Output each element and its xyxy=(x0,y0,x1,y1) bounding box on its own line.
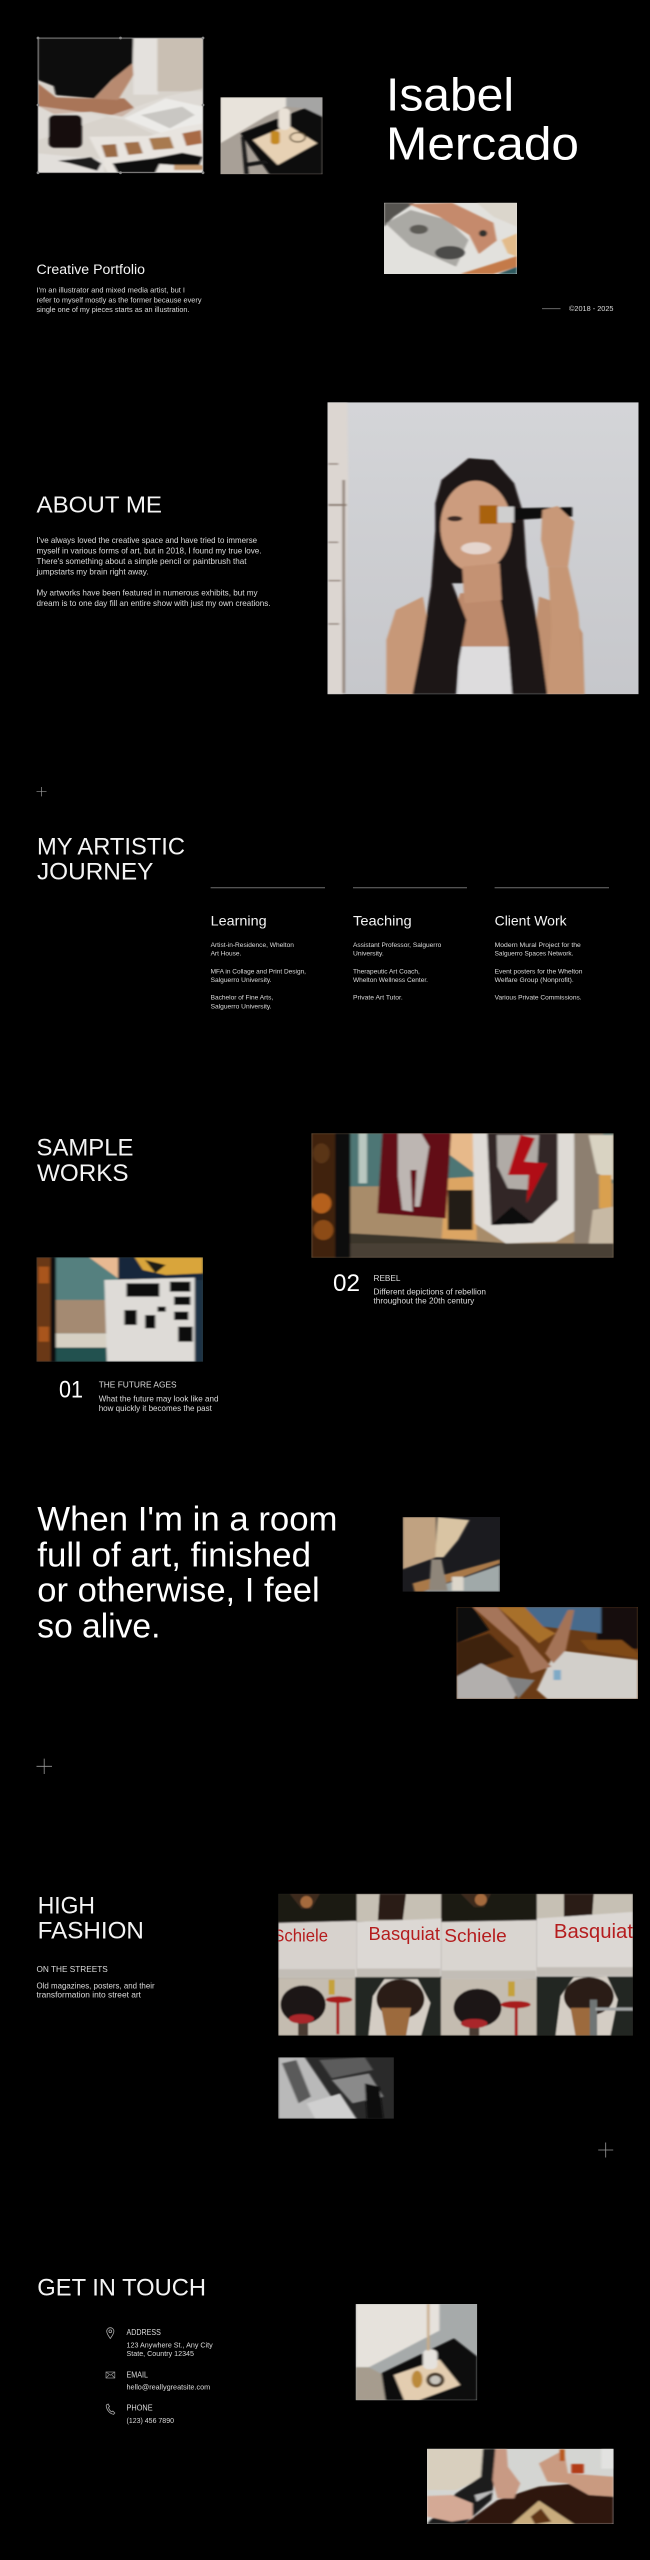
column: Client Work xyxy=(495,888,609,1002)
photo: future ages street poster xyxy=(36,1257,203,1362)
heading: MY ARTISTIC JOURNEY xyxy=(37,833,185,885)
subheading and description: Old magazines, posters, and their xyxy=(36,1980,155,1990)
panel: sample works xyxy=(36,1133,614,1413)
quote text xyxy=(37,1501,338,1645)
caption: 02 REBEL: REBEL xyxy=(374,1273,401,1283)
photo: table with vase and tray xyxy=(356,2304,478,2400)
heading: MY ARTISTIC JOURNEY: MY ARTISTIC xyxy=(37,833,185,860)
column: Learning: Salguerro University. xyxy=(211,977,272,984)
subheading and description: transformation into street art xyxy=(36,1990,142,2000)
heading: GET IN TOUCH: GET IN TOUCH xyxy=(37,2275,206,2302)
heading: SAMPLE WORKS xyxy=(36,1135,134,1187)
column: Teaching: University. xyxy=(353,951,384,958)
photo: black and white magazines xyxy=(278,2057,394,2119)
column: Learning: Bachelor of Fine Arts, xyxy=(211,995,273,1002)
column: Teaching: Whelton Wellness Center. xyxy=(353,977,428,984)
contact: phone xyxy=(106,2403,174,2425)
contact: address: 123 Anywhere St., Any City xyxy=(126,2340,213,2349)
about text: I've always loved the creative space and have tried to immerse xyxy=(36,536,258,545)
intro text: I'm an illustrator and mixed media artist, but I xyxy=(36,286,185,295)
icon: plus mark xyxy=(598,2142,613,2158)
intro text: refer to myself mostly as the former because every xyxy=(36,295,202,304)
heading: HIGH FASHION: FASHION xyxy=(38,1917,144,1944)
column: Teaching: Assistant Professor, Salguerro xyxy=(353,942,442,949)
photo: hands writing at desk with selection frame xyxy=(37,37,204,174)
poster lettering: Schiele xyxy=(444,1925,507,1946)
contact: phone: PHONE xyxy=(126,2403,153,2412)
contact: address: State, Country 12345 xyxy=(126,2349,194,2358)
panel: my artistic journey xyxy=(36,787,609,1010)
photo: side table with book xyxy=(220,97,322,174)
quote text: full of art, finished xyxy=(37,1536,311,1574)
contact: phone: (123) 456 7890 xyxy=(126,2416,174,2425)
heading: SAMPLE WORKS: WORKS xyxy=(37,1160,128,1187)
about text: myself in various forms of art, but in 2018, I found my true love. xyxy=(36,547,262,556)
photo: rebel street posters xyxy=(311,1133,614,1258)
icon: map pin xyxy=(107,2328,114,2338)
column: Learning: Learning xyxy=(211,913,267,929)
intro text xyxy=(36,286,202,314)
date range xyxy=(542,304,614,313)
panel: hero xyxy=(36,37,614,314)
poster lettering xyxy=(273,1920,633,1946)
title: Isabel Mercado: Isabel xyxy=(386,69,514,121)
column: Learning xyxy=(211,888,325,1010)
photo: woman holding paintbrush over eye xyxy=(328,402,638,694)
subheading and description xyxy=(36,1964,155,2000)
column: Learning: Artist-in-Residence, Whelton xyxy=(211,942,294,949)
contact: email: EMAIL xyxy=(126,2370,149,2379)
column: Teaching xyxy=(353,888,467,1002)
column: Learning: Salguerro University. xyxy=(211,1003,272,1010)
poster lettering: Basquiat xyxy=(369,1923,441,1944)
quote text: When I'm in a room xyxy=(37,1501,338,1539)
icon: plus mark xyxy=(36,787,46,796)
title: Isabel Mercado xyxy=(386,69,579,169)
date range: ©2018 - 2025 xyxy=(569,304,614,313)
icon: phone handset xyxy=(106,2404,115,2414)
panel: about me xyxy=(36,402,639,694)
column: Client Work: Modern Mural Project for the xyxy=(495,942,581,949)
photo: hand colouring illustrated map xyxy=(384,202,517,274)
caption: 02 REBEL xyxy=(333,1270,486,1305)
about text: jumpstarts my brain right away. xyxy=(36,568,148,577)
poster lettering: Schiele xyxy=(273,1926,328,1946)
icon: envelope xyxy=(106,2372,115,2378)
intro text: single one of my pieces starts as an illustration. xyxy=(36,305,190,314)
poster lettering: Basquiat xyxy=(554,1920,633,1943)
quote text: or otherwise, I feel xyxy=(37,1572,320,1610)
column: Client Work: Event posters for the Whelton xyxy=(495,968,583,975)
heading: SAMPLE WORKS: SAMPLE xyxy=(36,1135,134,1162)
about text: dream is to one day fill an entire show with just my own creations. xyxy=(36,599,270,608)
column: Learning: Art House. xyxy=(211,951,241,958)
column: Teaching: Private Art Tutor. xyxy=(353,995,403,1002)
panel: get in touch xyxy=(37,2275,614,2524)
caption: 01 THE FUTURE AGES: how quickly it becomes the past xyxy=(99,1403,213,1413)
caption: 02 REBEL: Different depictions of rebellion xyxy=(374,1286,486,1296)
contact: email xyxy=(106,2370,210,2392)
panel: high fashion xyxy=(36,1892,633,2158)
column: Client Work: Client Work xyxy=(495,913,568,929)
photo: hands making jewellery xyxy=(427,2448,614,2524)
caption: 01 THE FUTURE AGES: THE FUTURE AGES xyxy=(99,1380,177,1390)
caption: 02 REBEL: throughout the 20th century xyxy=(374,1295,475,1305)
heading: HIGH FASHION xyxy=(38,1892,144,1944)
subtitle: Creative Portfolio: Creative Portfolio xyxy=(36,262,145,277)
heading: MY ARTISTIC JOURNEY: JOURNEY xyxy=(37,858,153,885)
column: Client Work: Welfare Group (Nonprofit). xyxy=(495,977,574,984)
caption: 01 THE FUTURE AGES: 01 xyxy=(59,1377,83,1404)
column: Client Work: Salguerro Spaces Network. xyxy=(495,951,574,958)
column: Learning: MFA in Collage and Print Design, xyxy=(211,968,306,975)
contact: address: ADDRESS xyxy=(126,2328,161,2337)
contact: address xyxy=(107,2328,213,2358)
icon: plus mark xyxy=(36,1759,52,1774)
column: Teaching: Teaching xyxy=(353,913,412,929)
heading: ABOUT ME: ABOUT ME xyxy=(36,491,162,517)
photo: drawing on paper on wooden floor xyxy=(456,1607,638,1699)
photo: dried pampas in vase xyxy=(402,1517,500,1592)
caption: 01 THE FUTURE AGES xyxy=(59,1377,219,1413)
heading: HIGH FASHION: HIGH xyxy=(38,1892,95,1919)
about text xyxy=(36,536,270,608)
quote text: so alive. xyxy=(37,1607,160,1645)
photo: Schiele and Basquiat exhibition posters xyxy=(273,1894,633,2036)
column: Client Work: Various Private Commissions. xyxy=(495,995,582,1002)
subheading and description: ON THE STREETS xyxy=(36,1964,108,1974)
contact: email: hello@reallygreatsite.com xyxy=(126,2383,210,2392)
column: Teaching: Therapeutic Art Coach, xyxy=(353,968,420,975)
title: Isabel Mercado: Mercado xyxy=(386,117,579,169)
about text: There's something about a simple pencil or paintbrush that xyxy=(36,557,247,566)
about text: My artworks have been featured in numerous exhibits, but my xyxy=(36,588,258,597)
caption: 01 THE FUTURE AGES: What the future may look like and xyxy=(99,1394,219,1404)
panel: quote xyxy=(36,1501,638,1774)
caption: 02 REBEL: 02 xyxy=(333,1270,360,1297)
